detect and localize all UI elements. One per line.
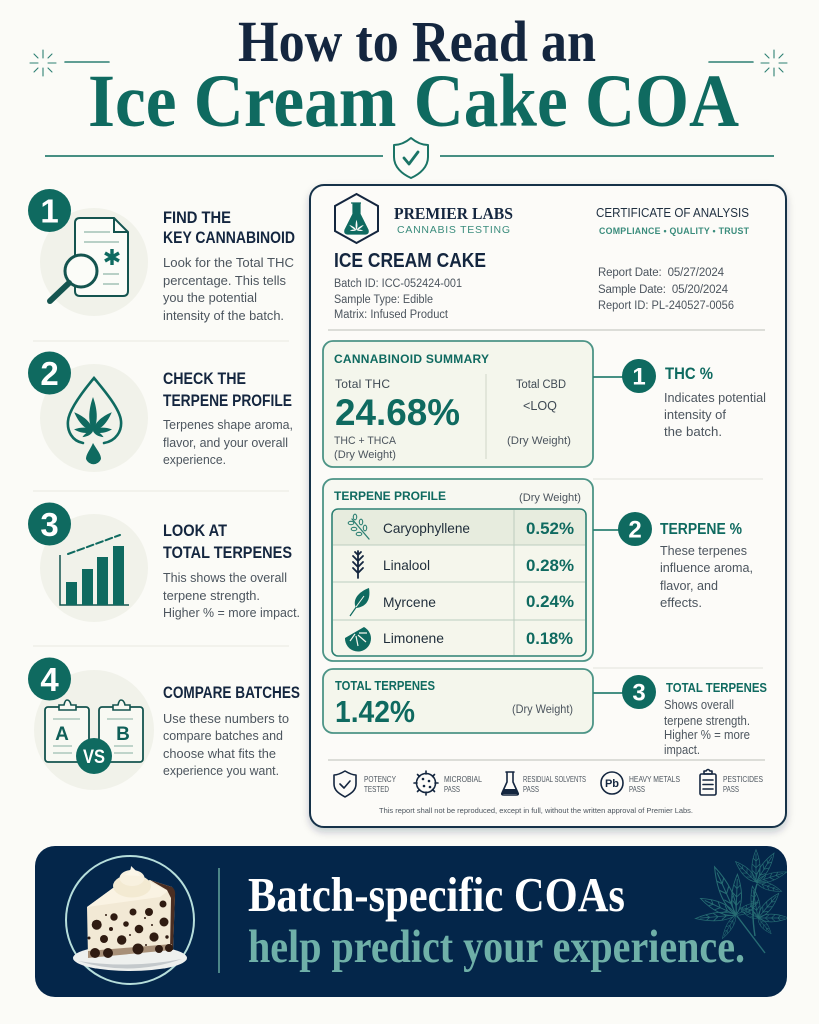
report dates: Sample Date: 05/20/2024 (598, 284, 729, 296)
badge: heavy metals pass (601, 772, 680, 794)
heading: TOTAL TERPENES (163, 543, 292, 562)
callout: total terpenes: TOTAL TERPENES (666, 680, 767, 695)
step 4 (28, 658, 300, 790)
badge: residual solvents pass (502, 772, 586, 795)
compliance row (334, 770, 763, 797)
product and batch details: Matrix: Infused Product (334, 309, 449, 321)
row: Linalool: Linalool (383, 557, 430, 573)
badge: heavy metals pass: HEAVY METALS (629, 775, 680, 784)
banner headline: Batch-specific COAs (248, 867, 625, 922)
decorative sparkle left (30, 50, 109, 76)
row: Caryophyllene: Caryophyllene (383, 520, 470, 536)
icon: A vs B clipboards (34, 670, 154, 790)
badge: potency tested: TESTED (364, 785, 389, 794)
panel: cannabinoid summary: THC + THCA (334, 435, 397, 447)
row: Linalool (353, 551, 574, 578)
description: This shows the overall (163, 570, 287, 585)
callout: THC % (593, 359, 766, 439)
badge: residual solvents pass: RESIDUAL SOLVENTS (523, 775, 586, 784)
panel: total terpenes: (Dry Weight) (512, 702, 573, 716)
description: experience. (163, 452, 226, 467)
terpene table (332, 509, 586, 656)
report dates: Report ID: PL-240527-0056 (598, 300, 734, 312)
description: Terpenes shape aroma, (163, 417, 293, 432)
badge: potency tested: POTENCY (364, 775, 397, 784)
panel: total terpenes (323, 669, 593, 733)
number badge 4 (28, 658, 71, 700)
icon: A vs B clipboards: A (55, 724, 69, 745)
report dates: Report Date: 05/27/2024 (598, 267, 725, 279)
badge: heavy metals pass: PASS (629, 785, 645, 794)
row: Caryophyllene: 0.52% (526, 519, 574, 538)
callout: total terpenes: 3 (632, 680, 646, 706)
decorative sparkle right (709, 50, 787, 76)
row: Limonene (345, 627, 573, 652)
banner headline (248, 867, 745, 973)
icon: cake slice (66, 856, 194, 984)
description: compare batches and (163, 728, 283, 743)
number badge 2 (28, 352, 71, 394)
product and batch details: ICE CREAM CAKE (334, 250, 486, 272)
certificate heading (596, 205, 750, 236)
callout: THC %: intensity of (664, 408, 727, 422)
panel: cannabinoid summary (323, 341, 593, 467)
callout: terpene %: influence aroma, (660, 561, 753, 575)
certificate heading: COMPLIANCE • QUALITY • TRUST (599, 226, 750, 236)
product and batch details (334, 250, 486, 321)
number badge 3 (28, 502, 71, 546)
description: intensity of the batch. (163, 308, 284, 323)
row: Limonene: Limonene (383, 630, 444, 646)
description (163, 570, 300, 620)
banner headline: help predict your experience. (248, 921, 745, 973)
panel: total terpenes: TOTAL TERPENES (335, 679, 435, 693)
step 1 (28, 189, 295, 323)
panel: cannabinoid summary: CANNABINOID SUMMARY (334, 352, 489, 366)
heading (163, 369, 292, 410)
step 2 (28, 352, 293, 472)
panel: cannabinoid summary: Total THC (335, 377, 390, 391)
number badge 4: 4 (40, 661, 59, 698)
callout: THC %: 1 (632, 364, 646, 390)
heading: LOOK AT (163, 521, 228, 540)
callout: terpene %: flavor, and (660, 579, 718, 593)
badge: microbial pass (414, 771, 482, 795)
description: Higher % = more impact. (163, 605, 300, 620)
description: flavor, and your overall (163, 435, 288, 450)
report dates (598, 267, 734, 312)
callout: terpene %: 2 (628, 516, 642, 544)
callout: THC %: the batch. (664, 425, 722, 439)
panel: terpene profile: (Dry Weight) (519, 492, 581, 504)
callout: THC %: Indicates potential (664, 391, 766, 405)
disclaimer: This report shall not be reproduced, except in full, without the written approval of Premier Labs. (379, 806, 693, 815)
header rule (45, 155, 774, 157)
header (30, 9, 787, 178)
lab logo (335, 194, 378, 243)
panel: cannabinoid summary: (Dry Weight) (334, 449, 396, 461)
callout: total terpenes: Shows overall (664, 698, 734, 712)
number badge 1: 1 (40, 192, 59, 230)
description: percentage. This tells (163, 273, 286, 288)
row: Myrcene: 0.24% (526, 592, 574, 611)
title line 1: How to Read an (238, 9, 596, 74)
icon: A vs B clipboards: VS (83, 747, 105, 768)
callout: total terpenes: Higher % = more (664, 728, 750, 742)
icon: shield (394, 138, 428, 178)
lab name (394, 204, 513, 236)
callout: terpene % (593, 512, 753, 610)
decorative cannabis leaves (695, 850, 789, 953)
lab name: PREMIER LABS (394, 204, 513, 223)
description: Use these numbers to (163, 711, 289, 726)
heading: TERPENE PROFILE (163, 391, 292, 410)
heading: COMPARE BATCHES (163, 683, 300, 702)
description (163, 255, 294, 323)
description: you the potential (163, 290, 257, 305)
description (163, 417, 293, 467)
callout: terpene %: effects. (660, 596, 702, 610)
title line 2: Ice Cream Cake COA (88, 60, 739, 143)
description: terpene strength. (163, 588, 260, 603)
lab name: CANNABIS TESTING (397, 224, 510, 236)
number badge 2: 2 (40, 355, 59, 392)
callout: total terpenes: terpene strength. (664, 714, 750, 728)
badge: pesticides pass (700, 770, 763, 795)
row: Caryophyllene (348, 514, 574, 539)
callout: terpene %: TERPENE % (660, 521, 742, 538)
badge: heavy metals pass: Pb (605, 778, 619, 790)
row: Limonene: 0.18% (526, 629, 573, 648)
badge: pesticides pass: PESTICIDES (723, 775, 763, 784)
product and batch details: Batch ID: ICC-052424-001 (334, 278, 462, 290)
panel: terpene profile: TERPENE PROFILE (334, 489, 446, 503)
badge: microbial pass: MICROBIAL (444, 775, 482, 784)
description: Look for the Total THC (163, 255, 294, 270)
number badge 3: 3 (40, 506, 59, 543)
panel: COA certificate (310, 185, 786, 827)
total terpenes value: 1.42% (335, 694, 415, 729)
total THC value: 24.68% (335, 392, 460, 433)
heading: KEY CANNABINOID (163, 228, 295, 247)
icon: bar chart (40, 514, 148, 622)
step 3 (28, 502, 300, 622)
number badge 1 (28, 189, 71, 232)
badge: residual solvents pass: PASS (523, 785, 539, 794)
callout: THC %: THC % (665, 364, 713, 383)
callout: total terpenes: impact. (664, 743, 700, 757)
panel: terpene profile (323, 479, 593, 661)
product and batch details: Sample Type: Edible (334, 294, 433, 306)
row: Myrcene: Myrcene (383, 594, 436, 610)
row: Myrcene (350, 588, 574, 616)
heading (163, 208, 295, 247)
panel: cannabinoid summary: <LOQ (523, 399, 557, 413)
heading (163, 521, 292, 562)
banner (35, 846, 789, 997)
description (163, 711, 289, 778)
description: choose what fits the (163, 746, 276, 761)
heading: FIND THE (163, 208, 231, 227)
certificate heading: CERTIFICATE OF ANALYSIS (596, 205, 749, 220)
icon: terpene drop (40, 364, 148, 472)
panel: cannabinoid summary: Total CBD (516, 379, 566, 391)
icon: A vs B clipboards: B (116, 724, 130, 745)
badge: microbial pass: PASS (444, 785, 460, 794)
heading: CHECK THE (163, 369, 246, 388)
panel: cannabinoid summary: (Dry Weight) (507, 435, 571, 447)
badge: pesticides pass: PASS (723, 785, 739, 794)
callout: total terpenes (593, 675, 767, 757)
description: experience you want. (163, 763, 279, 778)
badge: potency tested (334, 771, 397, 797)
icon: document and magnifier (40, 208, 148, 316)
row: Linalool: 0.28% (526, 556, 574, 575)
callout: terpene %: These terpenes (660, 544, 747, 558)
